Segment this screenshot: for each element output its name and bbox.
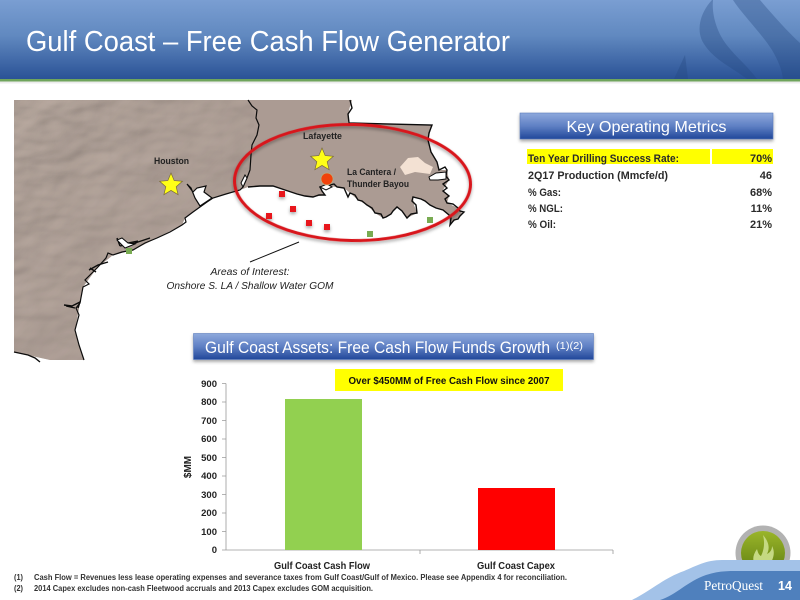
leader line (250, 242, 299, 262)
bar chart: cash flow vs capex (183, 379, 613, 572)
y axis title: $MM (183, 456, 194, 478)
map: Gulf Coast (14, 100, 472, 362)
icon: red squares (266, 191, 330, 230)
icon: Lafayette star (311, 148, 333, 170)
footnotes: 2014 Capex excludes non-cash Fleetwood accruals and 2013 Capex excludes GOM acquisition. (34, 584, 373, 593)
heading banner: key operating metrics: Key Operating Metrics (566, 119, 726, 136)
icon: header flame watermark (674, 0, 800, 79)
metrics table: % Gas: (528, 187, 561, 199)
bar: Gulf Coast Capex (478, 488, 555, 550)
panel: key operating metrics (520, 113, 773, 231)
metrics table: 2Q17 Production (Mmcfe/d) (528, 170, 668, 182)
bays (187, 184, 212, 206)
heading banner: gulf coast assets: Gulf Coast Assets: Free Cash Flow Funds Growth (205, 339, 550, 357)
heading banner: gulf coast assets (194, 334, 594, 360)
metrics table (528, 153, 772, 231)
x axis labels (274, 561, 555, 572)
icon: flame badge (736, 526, 790, 580)
axes (222, 384, 613, 554)
coastline (75, 100, 259, 360)
label: La Cantera: Thunder Bayou (347, 179, 409, 189)
callout: free cash flow since 2007: Over $450MM of Free Cash Flow since 2007 (348, 376, 550, 387)
callout text: areas of interest: Onshore S. LA / Shallow Water GOM (166, 281, 334, 292)
bar: Gulf Coast Cash Flow (285, 399, 362, 550)
callout: free cash flow since 2007 (335, 369, 563, 391)
y axis labels: 700 (201, 416, 217, 427)
x axis labels: Gulf Coast Cash Flow (274, 561, 370, 572)
y axis labels: 800 (201, 397, 217, 408)
footnotes: (1) (14, 573, 23, 582)
y axis labels: 300 (201, 490, 217, 501)
footnotes: (2) (14, 584, 23, 593)
metrics table: % Oil: (528, 219, 556, 231)
land mass (14, 100, 462, 360)
footer band dark (660, 571, 800, 600)
callout text: areas of interest: Areas of Interest: (209, 267, 290, 278)
title: Gulf Coast – Free Cash Flow Generator (26, 26, 510, 58)
footnotes (14, 573, 567, 593)
icon: green squares (126, 217, 433, 254)
y axis labels: 400 (201, 471, 217, 482)
y axis labels: 500 (201, 453, 217, 464)
footer band light (632, 560, 800, 600)
metrics table: 46 (760, 170, 772, 182)
metrics table: 70% (750, 153, 772, 165)
highlight row (527, 149, 773, 164)
logo: PetroQuest footer (632, 526, 800, 600)
icon: La Cantera marker (321, 173, 333, 185)
heading banner: key operating metrics (520, 113, 773, 139)
y axis labels: 200 (201, 508, 217, 519)
page number: 14 (778, 579, 792, 593)
callout text: areas of interest (166, 267, 334, 292)
icon: Houston star (160, 173, 182, 195)
header band (0, 0, 800, 84)
y axis labels: 900 (201, 379, 217, 390)
heading banner: gulf coast assets: (1)(2) (556, 341, 583, 352)
y axis labels (201, 379, 217, 556)
metrics table: 68% (750, 187, 772, 199)
y axis labels: 600 (201, 434, 217, 445)
label: Lafayette: Lafayette (303, 131, 342, 141)
metrics table: 21% (750, 219, 772, 231)
callout ellipse: areas of interest (234, 122, 472, 243)
footnotes: Cash Flow = Revenues less lease operating expenses and severance taxes from Gulf Coast/Gulf of Mexico. Please see Appendix 4 for reconciliation. (34, 573, 567, 582)
x axis labels: Gulf Coast Capex (477, 561, 555, 572)
area: pale blob (400, 157, 433, 175)
metrics table: % NGL: (528, 203, 563, 215)
label: Houston: Houston (154, 156, 189, 166)
label: La Cantera: La Cantera / (347, 167, 396, 177)
y axis labels: 0 (212, 545, 217, 556)
y axis labels: 100 (201, 527, 217, 538)
metrics table: Ten Year Drilling Success Rate: (528, 153, 679, 165)
wordmark: PetroQuest (704, 578, 763, 593)
label: La Cantera (347, 167, 409, 189)
metrics table: 11% (751, 203, 772, 215)
